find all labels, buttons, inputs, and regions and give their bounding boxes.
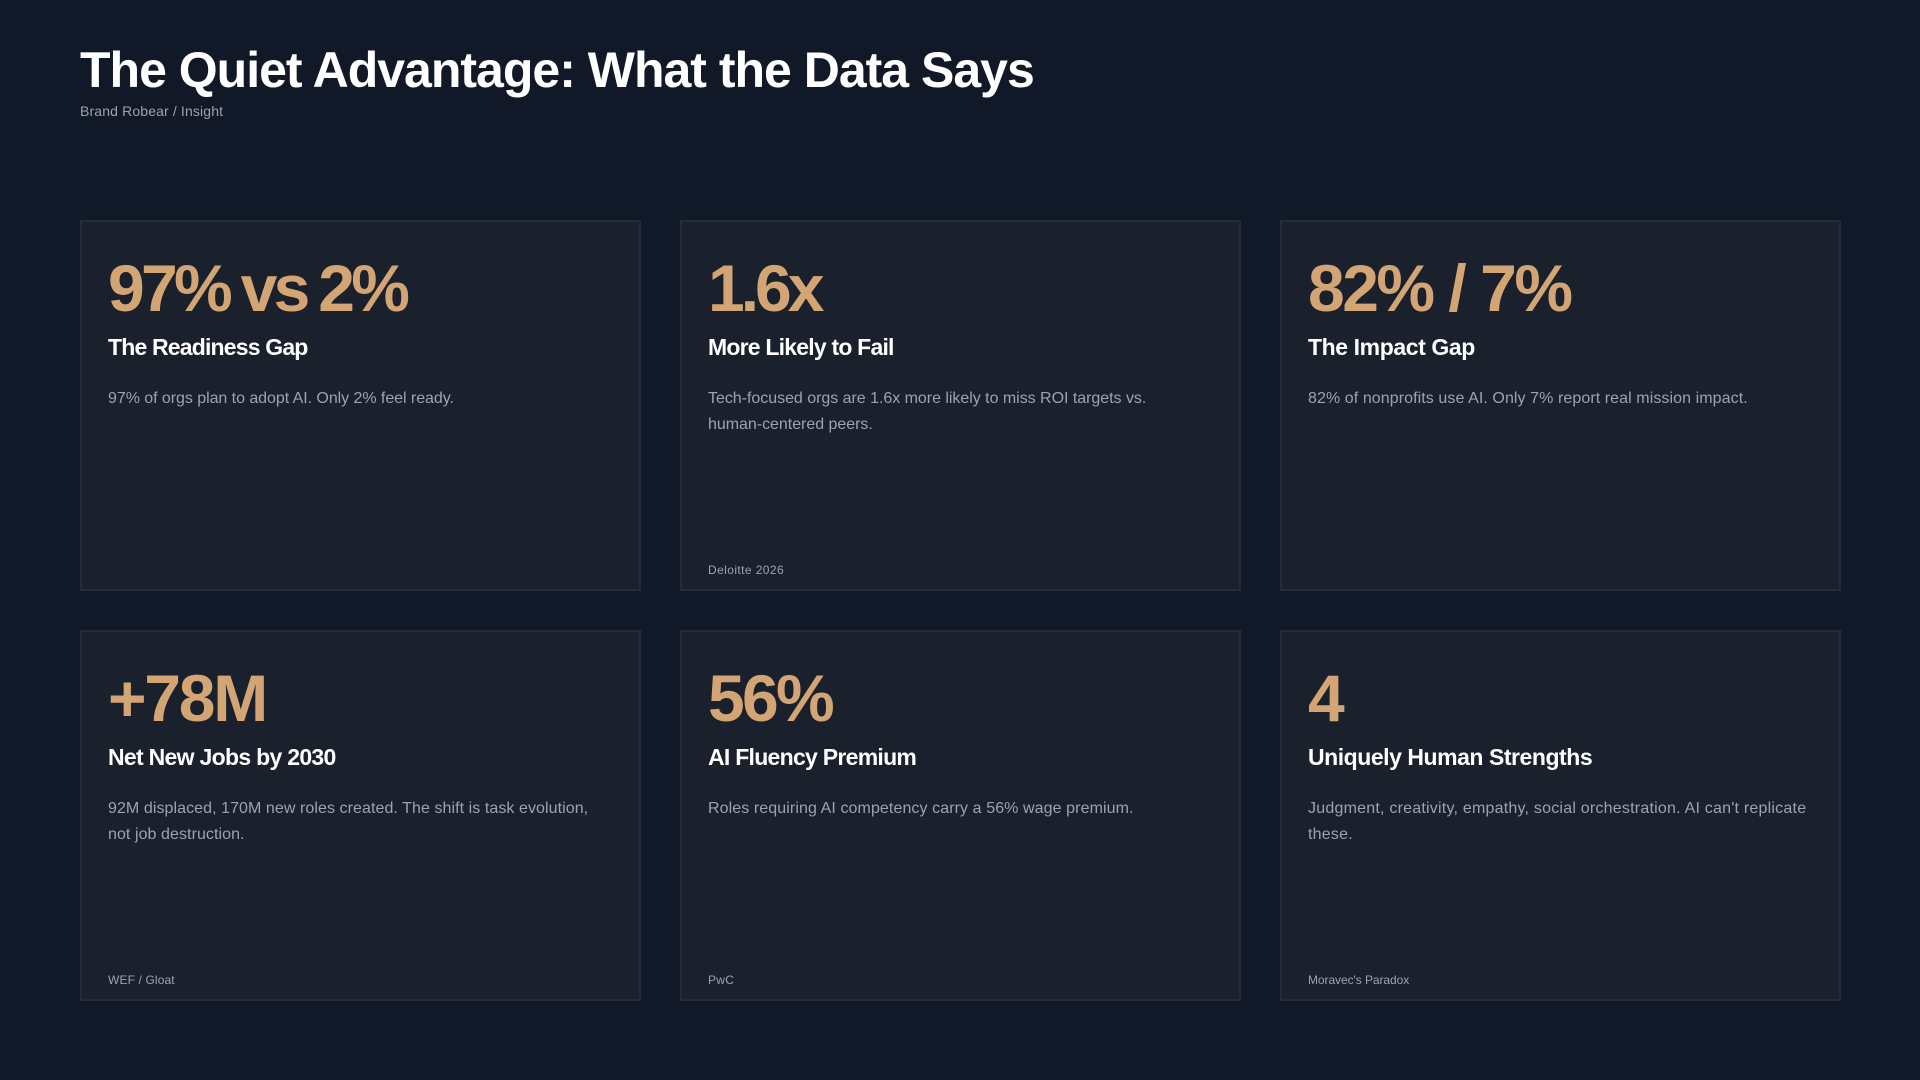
panel: ai fluency premium (680, 630, 1241, 1001)
stat: 56%: 56% (708, 661, 832, 735)
stat: +78M: +78M (108, 661, 266, 735)
text: failure description: Tech-focused orgs are 1.6x more likely to miss ROI targets vs. (708, 390, 1146, 407)
source: pwc: PwC (708, 973, 734, 987)
stat: 4: 4 (1308, 661, 1345, 735)
panel: the impact gap (1280, 220, 1841, 591)
text: failure description: human-centered peers. (708, 416, 873, 433)
heading: human strengths: Uniquely Human Strengths (1308, 744, 1592, 770)
heading: the readiness gap: The Readiness Gap (108, 334, 308, 360)
source: deloitte: Deloitte 2026 (708, 563, 784, 577)
panel: net new jobs (80, 630, 641, 1001)
heading: net new jobs: Net New Jobs by 2030 (108, 744, 336, 770)
text: premium description: Roles requiring AI competency carry a 56% wage premium. (708, 800, 1134, 817)
heading: the impact gap: The Impact Gap (1308, 334, 1475, 360)
heading: ai fluency premium: AI Fluency Premium (708, 744, 916, 770)
text: jobs description: 92M displaced, 170M new roles created. The shift is task evolution, (108, 800, 588, 817)
subtitle: Brand Robear / Insight (80, 103, 223, 119)
text: strengths description (1308, 800, 1806, 843)
text: readiness description: 97% of orgs plan to adopt AI. Only 2% feel ready. (108, 390, 454, 407)
stat: 97% vs 2%: 97% vs 2% (108, 251, 406, 325)
text: strengths description: Judgment, creativity, empathy, social orchestration. AI can't replicate (1308, 800, 1806, 817)
text: jobs description: not job destruction. (108, 826, 245, 843)
panel: human strengths (1280, 630, 1841, 1001)
text: jobs description (108, 800, 588, 843)
stat: 1.6x: 1.6x (708, 251, 820, 325)
text: failure description (708, 390, 1146, 433)
panel: more likely to fail (680, 220, 1241, 591)
text: strengths description: these. (1308, 826, 1353, 843)
source: wef gloat: WEF / Gloat (108, 973, 175, 987)
stat: 82% / 7%: 82% / 7% (1308, 251, 1570, 325)
heading: more likely to fail: More Likely to Fail (708, 334, 894, 360)
panel: the readiness gap (80, 220, 641, 591)
title: The Quiet Advantage: What the Data Says (80, 42, 1034, 98)
source: moravec: Moravec's Paradox (1308, 973, 1409, 987)
text: impact description: 82% of nonprofits use AI. Only 7% report real mission impact. (1308, 390, 1748, 407)
